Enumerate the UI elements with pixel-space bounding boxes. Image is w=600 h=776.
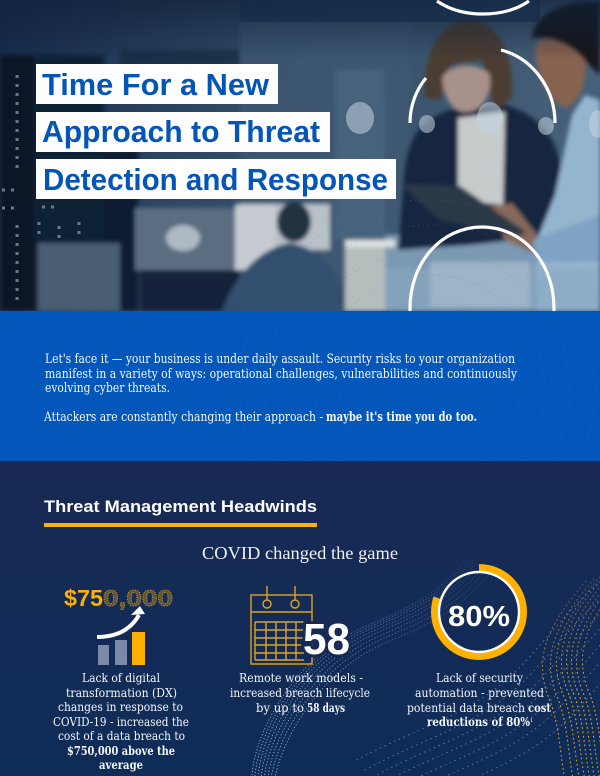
stat: 80% bbox=[407, 568, 551, 729]
stat text bbox=[407, 670, 551, 729]
title line 2: Approach to Threat bbox=[42, 114, 320, 149]
stat text: increased breach lifecycle bbox=[230, 685, 370, 700]
white ring arcs bbox=[410, 1, 555, 311]
stat text: transformation (DX) bbox=[66, 685, 177, 700]
stat text: Lack of security bbox=[436, 670, 524, 685]
intro paragraph bbox=[45, 352, 518, 396]
title bbox=[36, 64, 396, 199]
dollar figure: 0,000 bbox=[103, 585, 173, 611]
title line 1: Time For a New bbox=[42, 67, 270, 102]
stat text: cost bbox=[528, 700, 551, 715]
panel: threat management headwinds bbox=[0, 461, 600, 776]
stat text bbox=[230, 670, 370, 715]
intro paragraph: manifest in a variety of ways: operational challenges, vulnerabilities and continuously bbox=[45, 367, 518, 382]
stat text: automation - prevented bbox=[415, 685, 544, 700]
dollar figure bbox=[64, 585, 173, 611]
subheading: COVID changed the game bbox=[202, 543, 398, 563]
stat: $750,000 bbox=[53, 585, 189, 772]
intro paragraph: evolving cyber threats. bbox=[45, 381, 170, 396]
stat text bbox=[53, 670, 189, 772]
stat text: changes in response to bbox=[58, 699, 183, 714]
stat text: $750,000 above the bbox=[67, 743, 175, 758]
stat text: by up to bbox=[256, 700, 304, 715]
stat text: potential data breach bbox=[407, 700, 525, 715]
intro closing line: maybe it's time you do too. bbox=[326, 410, 477, 425]
stat text: 1 bbox=[530, 718, 533, 724]
dollar figure: $75 bbox=[64, 585, 103, 611]
icon: rising bar chart with arrow bbox=[97, 606, 145, 665]
section heading bbox=[44, 497, 317, 527]
stat text: Remote work models - bbox=[239, 670, 363, 685]
intro closing line: Attackers are constantly changing their approach - bbox=[43, 410, 323, 425]
hero photo: security team with tablet bbox=[0, 0, 600, 311]
stat: 58 days bbox=[230, 586, 370, 715]
stat text: COVID-19 - increased the bbox=[53, 714, 189, 729]
icon: progress ring bbox=[434, 568, 524, 656]
percentage: 80% bbox=[448, 601, 510, 633]
panel: intro bbox=[0, 200, 600, 580]
stat text: average bbox=[99, 757, 143, 772]
icon: calendar bbox=[251, 586, 312, 664]
stat text: cost of a data breach to bbox=[58, 728, 185, 743]
title line 3: Detection and Response bbox=[43, 162, 388, 197]
stat text: reductions of 80% bbox=[427, 714, 530, 729]
section heading: Threat Management Headwinds bbox=[44, 497, 317, 516]
number 58: 58 bbox=[303, 615, 350, 664]
stat text: Lack of digital bbox=[82, 670, 160, 685]
intro paragraph: Let's face it — your business is under daily assault. Security risks to your organization bbox=[45, 352, 516, 367]
dotted wave background bbox=[252, 559, 600, 776]
translucent bokeh circles bbox=[346, 102, 600, 138]
stat text: 58 days bbox=[307, 700, 345, 715]
